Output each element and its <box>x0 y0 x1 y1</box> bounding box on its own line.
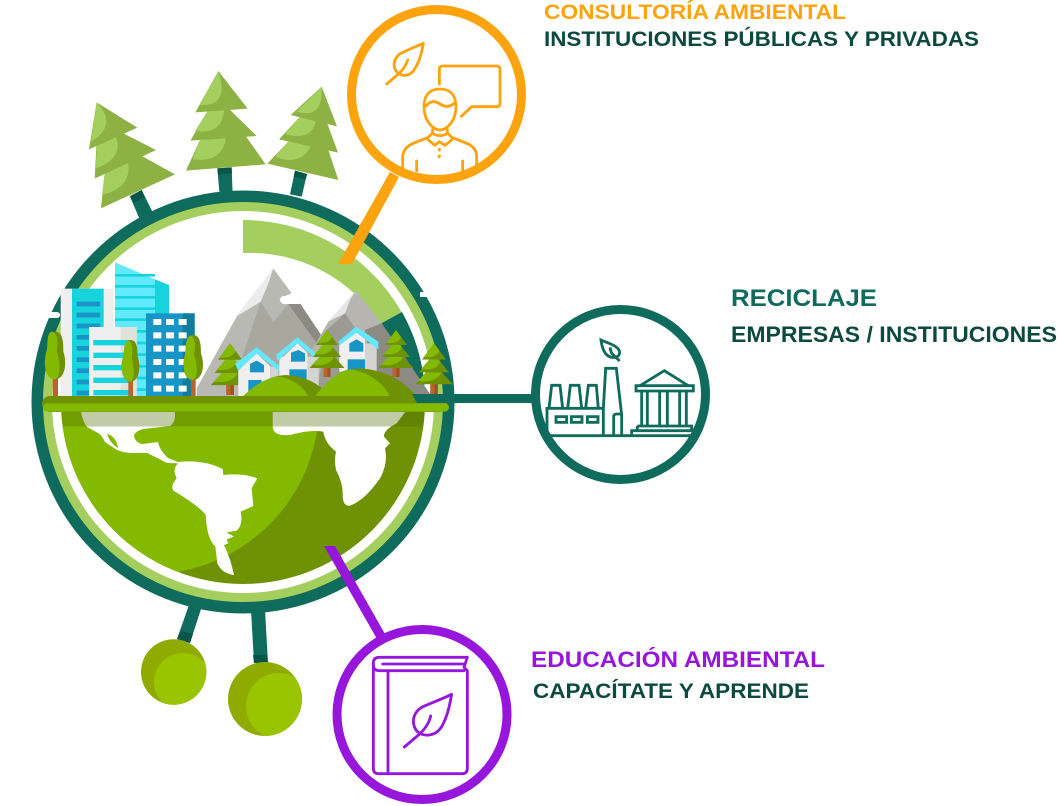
top trees on the globe <box>89 71 338 220</box>
main mountain <box>197 268 347 396</box>
Africa <box>273 410 407 506</box>
Gulf crescent <box>107 434 118 448</box>
circle: educación <box>337 630 507 800</box>
circle: consultoría <box>352 10 522 180</box>
globe outer rings <box>38 196 448 608</box>
dark wedge behind mountains <box>382 312 425 403</box>
bottom legs and spheres <box>141 605 312 739</box>
purple connector <box>324 546 385 639</box>
city buildings <box>45 262 203 396</box>
heading: educación ambiental: EDUCACIÓN AMBIENTAL <box>531 647 825 672</box>
green hills <box>243 368 417 396</box>
shadow strip under the ground <box>60 411 430 426</box>
orange connector <box>338 172 399 264</box>
Americas <box>81 410 257 575</box>
icon: advisor with speech bubble and leaf <box>387 43 500 171</box>
subheading: instituciones: INSTITUCIONES PÚBLICAS Y PRIVADAS <box>544 27 979 51</box>
connector line to reciclaje <box>412 394 535 403</box>
pine trees in town <box>211 330 453 395</box>
globe lower hemisphere with continents <box>61 412 425 584</box>
heading: consultoría ambiental: CONSULTORÍA AMBIENTAL <box>544 1 846 24</box>
circle: reciclaje <box>536 310 706 480</box>
house three <box>338 327 378 372</box>
second mountain <box>310 291 430 394</box>
subheading: empresas: EMPRESAS / INSTITUCIONES <box>731 322 1057 347</box>
icon: factory and institution <box>547 340 693 436</box>
pines in front of houses <box>310 330 344 377</box>
heading: reciclaje: RECICLAJE <box>731 285 877 312</box>
sky band arc <box>243 220 402 327</box>
house two <box>276 337 319 396</box>
subheading: capacítate: CAPACÍTATE Y APRENDE <box>533 680 809 703</box>
house one <box>235 347 279 396</box>
icon: book with leaf <box>373 657 467 774</box>
ground bar <box>42 396 449 412</box>
